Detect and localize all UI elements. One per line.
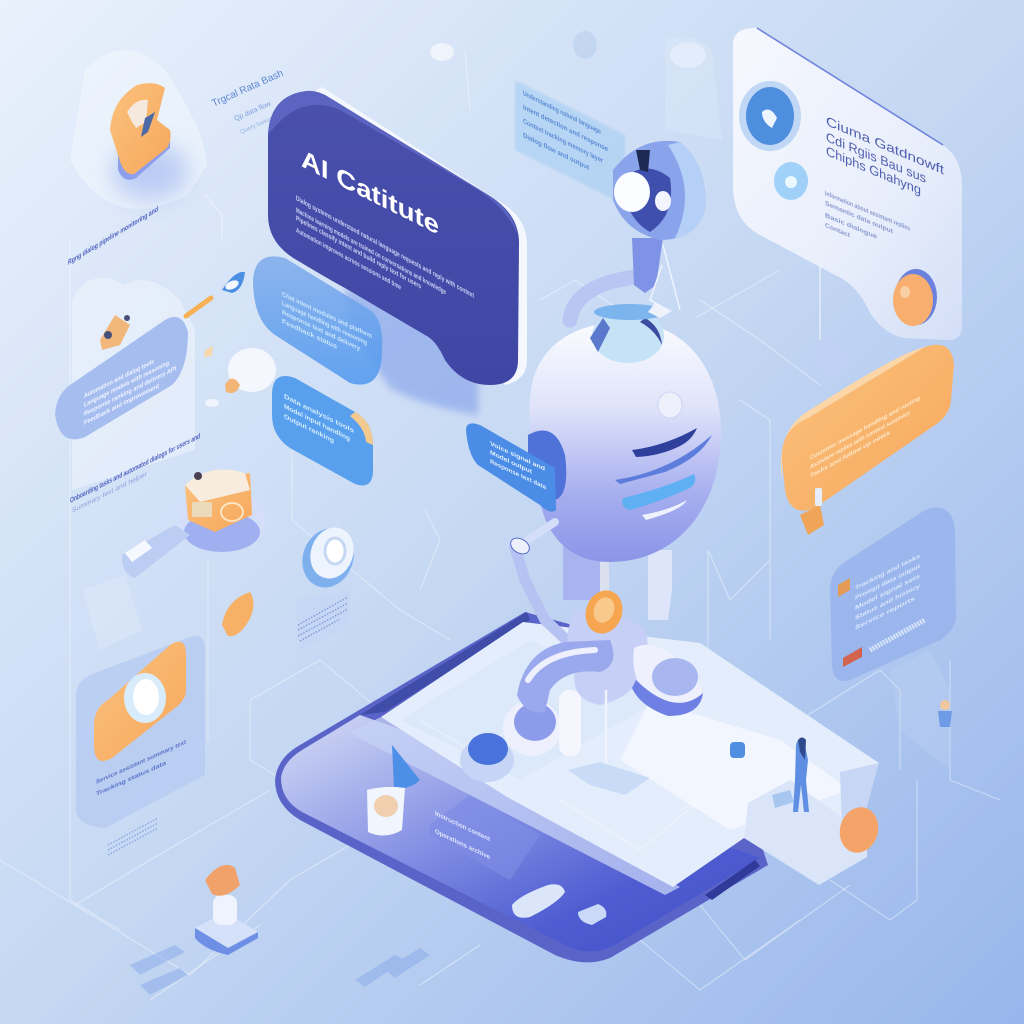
screen pills — [512, 884, 606, 925]
text: left caption two: Onboarding tasks and automated dialogs for users and — [70, 431, 200, 505]
panel: faint left lower ghost — [82, 575, 142, 650]
panel: bottom left orange card: Tracking status data — [96, 759, 167, 798]
robot body stem — [563, 540, 601, 600]
body text lines: Machine learning models are trained on conversations and knowledge — [296, 205, 446, 296]
card heading — [826, 113, 944, 208]
blue wing label: Voice signal and — [490, 440, 545, 473]
platform surface — [381, 622, 879, 887]
text: small heading top left: Qp data flow — [233, 100, 273, 123]
panel: dark title card — [268, 87, 527, 385]
icon: orange leaf — [222, 592, 254, 636]
device dark top edge — [360, 612, 530, 715]
screen shelf band — [349, 717, 680, 895]
panel: right translucent list card: Service reports — [855, 595, 916, 632]
icon: orange coin — [835, 803, 883, 857]
curl highlight — [528, 650, 595, 680]
device outer shell — [275, 612, 768, 962]
platform roll — [840, 763, 879, 828]
card heading: Cdi Rgiis Bau sus — [826, 129, 926, 186]
robot — [466, 141, 721, 795]
figure: person standing — [772, 738, 809, 812]
card body text: Information about assistant replies — [825, 190, 910, 233]
tablet base — [275, 612, 883, 962]
panel: left bubble with figures: Response ranking and delivery API — [84, 365, 176, 418]
screen inset panel — [430, 795, 540, 880]
robot rear leg — [648, 550, 672, 620]
left lower ring foot — [503, 700, 561, 756]
panel: orange card — [781, 345, 954, 535]
panel: top middle blue text card: Context tracking memory layer — [523, 116, 603, 165]
panel: right translucent list card: Status and history — [855, 583, 921, 622]
body collar arc — [570, 277, 635, 320]
screen text: Instruction content — [435, 810, 491, 844]
panel: blue bubble one: Language handling with reasoning — [282, 300, 367, 347]
panel: blue bubble two: Data analysis tools — [284, 393, 354, 435]
panel: top middle blue text card: Understanding natural language — [523, 88, 601, 136]
elbow joint — [508, 535, 532, 557]
body side knob — [658, 392, 682, 418]
chest orange medallion — [580, 585, 628, 639]
body text lines: Dialog systems understand natural language requests and reply with context — [296, 193, 474, 300]
panel: translucent ghost behind dark card — [345, 285, 478, 415]
icon: glow orb — [774, 162, 808, 200]
chart: bottom floor pixel blocks — [130, 945, 430, 995]
panel: ghost card right edge — [890, 650, 950, 770]
card body text: Contact — [825, 222, 851, 240]
icon: orange box on disc — [122, 469, 266, 578]
card heading: Ciuma Gatdnowft — [826, 113, 944, 178]
panel: bottom left orange card: Service assistant summary text — [96, 738, 187, 786]
hip — [568, 610, 648, 705]
text: left caption two: Summary text and helper — [72, 469, 147, 515]
panel: orange card: Tasks and follow up notes — [810, 429, 890, 480]
body opening — [590, 303, 672, 363]
panel: top middle blue text card — [515, 80, 625, 205]
panel: orange card: Assistant replies with context summary — [810, 409, 910, 471]
hip dark dot — [576, 654, 608, 670]
panel: blue bubble two — [272, 376, 373, 486]
small jar icon — [730, 742, 745, 758]
panel: top right ghost cards — [430, 31, 722, 140]
icon: floral cup — [367, 787, 405, 836]
icon: tiny figure right — [938, 700, 952, 727]
card body text — [825, 190, 910, 265]
text: small heading top left: Query lookup text — [239, 111, 285, 136]
panel: top middle blue text card: Dialog flow and output — [523, 130, 589, 172]
panel: blue bubble one: Feedback status — [282, 318, 337, 351]
panel: top right white card — [733, 28, 962, 340]
icons: small floating items — [204, 272, 276, 407]
text: small heading top left: Trgcal Rata Bash — [210, 68, 285, 109]
device screen — [281, 715, 760, 952]
left curl leg — [517, 640, 613, 712]
arm socket — [528, 430, 566, 500]
dark notch — [705, 860, 760, 900]
front slim leg — [605, 690, 607, 770]
panel: blue bubble one: Response text and delivery — [282, 309, 360, 353]
icon: blue dome button — [460, 733, 514, 782]
blue wing label — [466, 423, 556, 512]
head — [613, 141, 705, 240]
icon: ring and barcode — [294, 521, 362, 650]
panel: bottom left orange card — [76, 636, 205, 855]
right foot — [632, 645, 703, 716]
title: AI Catitute — [301, 143, 439, 241]
card body text: Basic dialogue — [825, 212, 877, 241]
neck — [632, 238, 663, 293]
icon: person on pedestal — [195, 865, 258, 955]
robot body — [529, 322, 721, 562]
icon: orange button — [893, 269, 937, 326]
panel: right translucent list card — [830, 508, 956, 681]
panel: right translucent list card: Tracking and tasks — [855, 553, 921, 592]
upper arm link — [520, 522, 555, 545]
panel: left bubble with figures: Feedback and improvement — [84, 382, 160, 427]
panel: left bubble with figures: Automation and dialog tools — [84, 358, 154, 400]
body text lines: Automation improves across sessions and time — [296, 225, 401, 292]
icon: blue triangle — [392, 745, 420, 788]
panel: right translucent list card: Model signal sets — [855, 573, 921, 612]
mouth slots — [615, 428, 712, 520]
text: small heading top left — [210, 68, 299, 141]
robot arm — [515, 548, 575, 648]
panel: orange card: Customer message handling and routing — [810, 395, 920, 462]
platform extension — [744, 780, 867, 885]
robot rod — [600, 555, 609, 600]
screen text — [435, 810, 491, 862]
panel: left bubble with figures: Language models with reasoning — [84, 360, 169, 409]
text: left caption two — [70, 431, 200, 515]
neck cable — [650, 245, 680, 310]
panel: blue bubble one: Chat intent modules and platform — [282, 291, 372, 340]
panel: right translucent list card: Prompt data output — [855, 562, 921, 602]
panel: left bubble with figures — [55, 278, 211, 490]
panel: blue bubble two: Output ranking — [284, 413, 334, 445]
walker base — [568, 762, 650, 795]
body text lines: Pipelines classify intent and build reply text for users — [296, 213, 421, 291]
panel: top left orange icon — [70, 50, 207, 209]
white leg — [559, 690, 581, 756]
icon: small hanging cube — [815, 262, 850, 378]
panel: blue bubble two: Model input handling — [284, 403, 350, 443]
icon: blue leaf button — [739, 81, 801, 151]
blue wing label: Response text data — [490, 458, 546, 491]
panel: blue bubble one — [253, 256, 382, 385]
card heading: Chiphs Ghahyng — [826, 143, 921, 198]
blue wing label: Model output — [490, 449, 533, 476]
panel: top middle blue text card: Intent detection and response — [523, 102, 608, 153]
text: left caption one: Rgng dialog pipeline monitoring and — [68, 205, 158, 267]
card body text: Semantic data output — [825, 200, 894, 236]
screen text: Operations archive — [435, 828, 490, 861]
